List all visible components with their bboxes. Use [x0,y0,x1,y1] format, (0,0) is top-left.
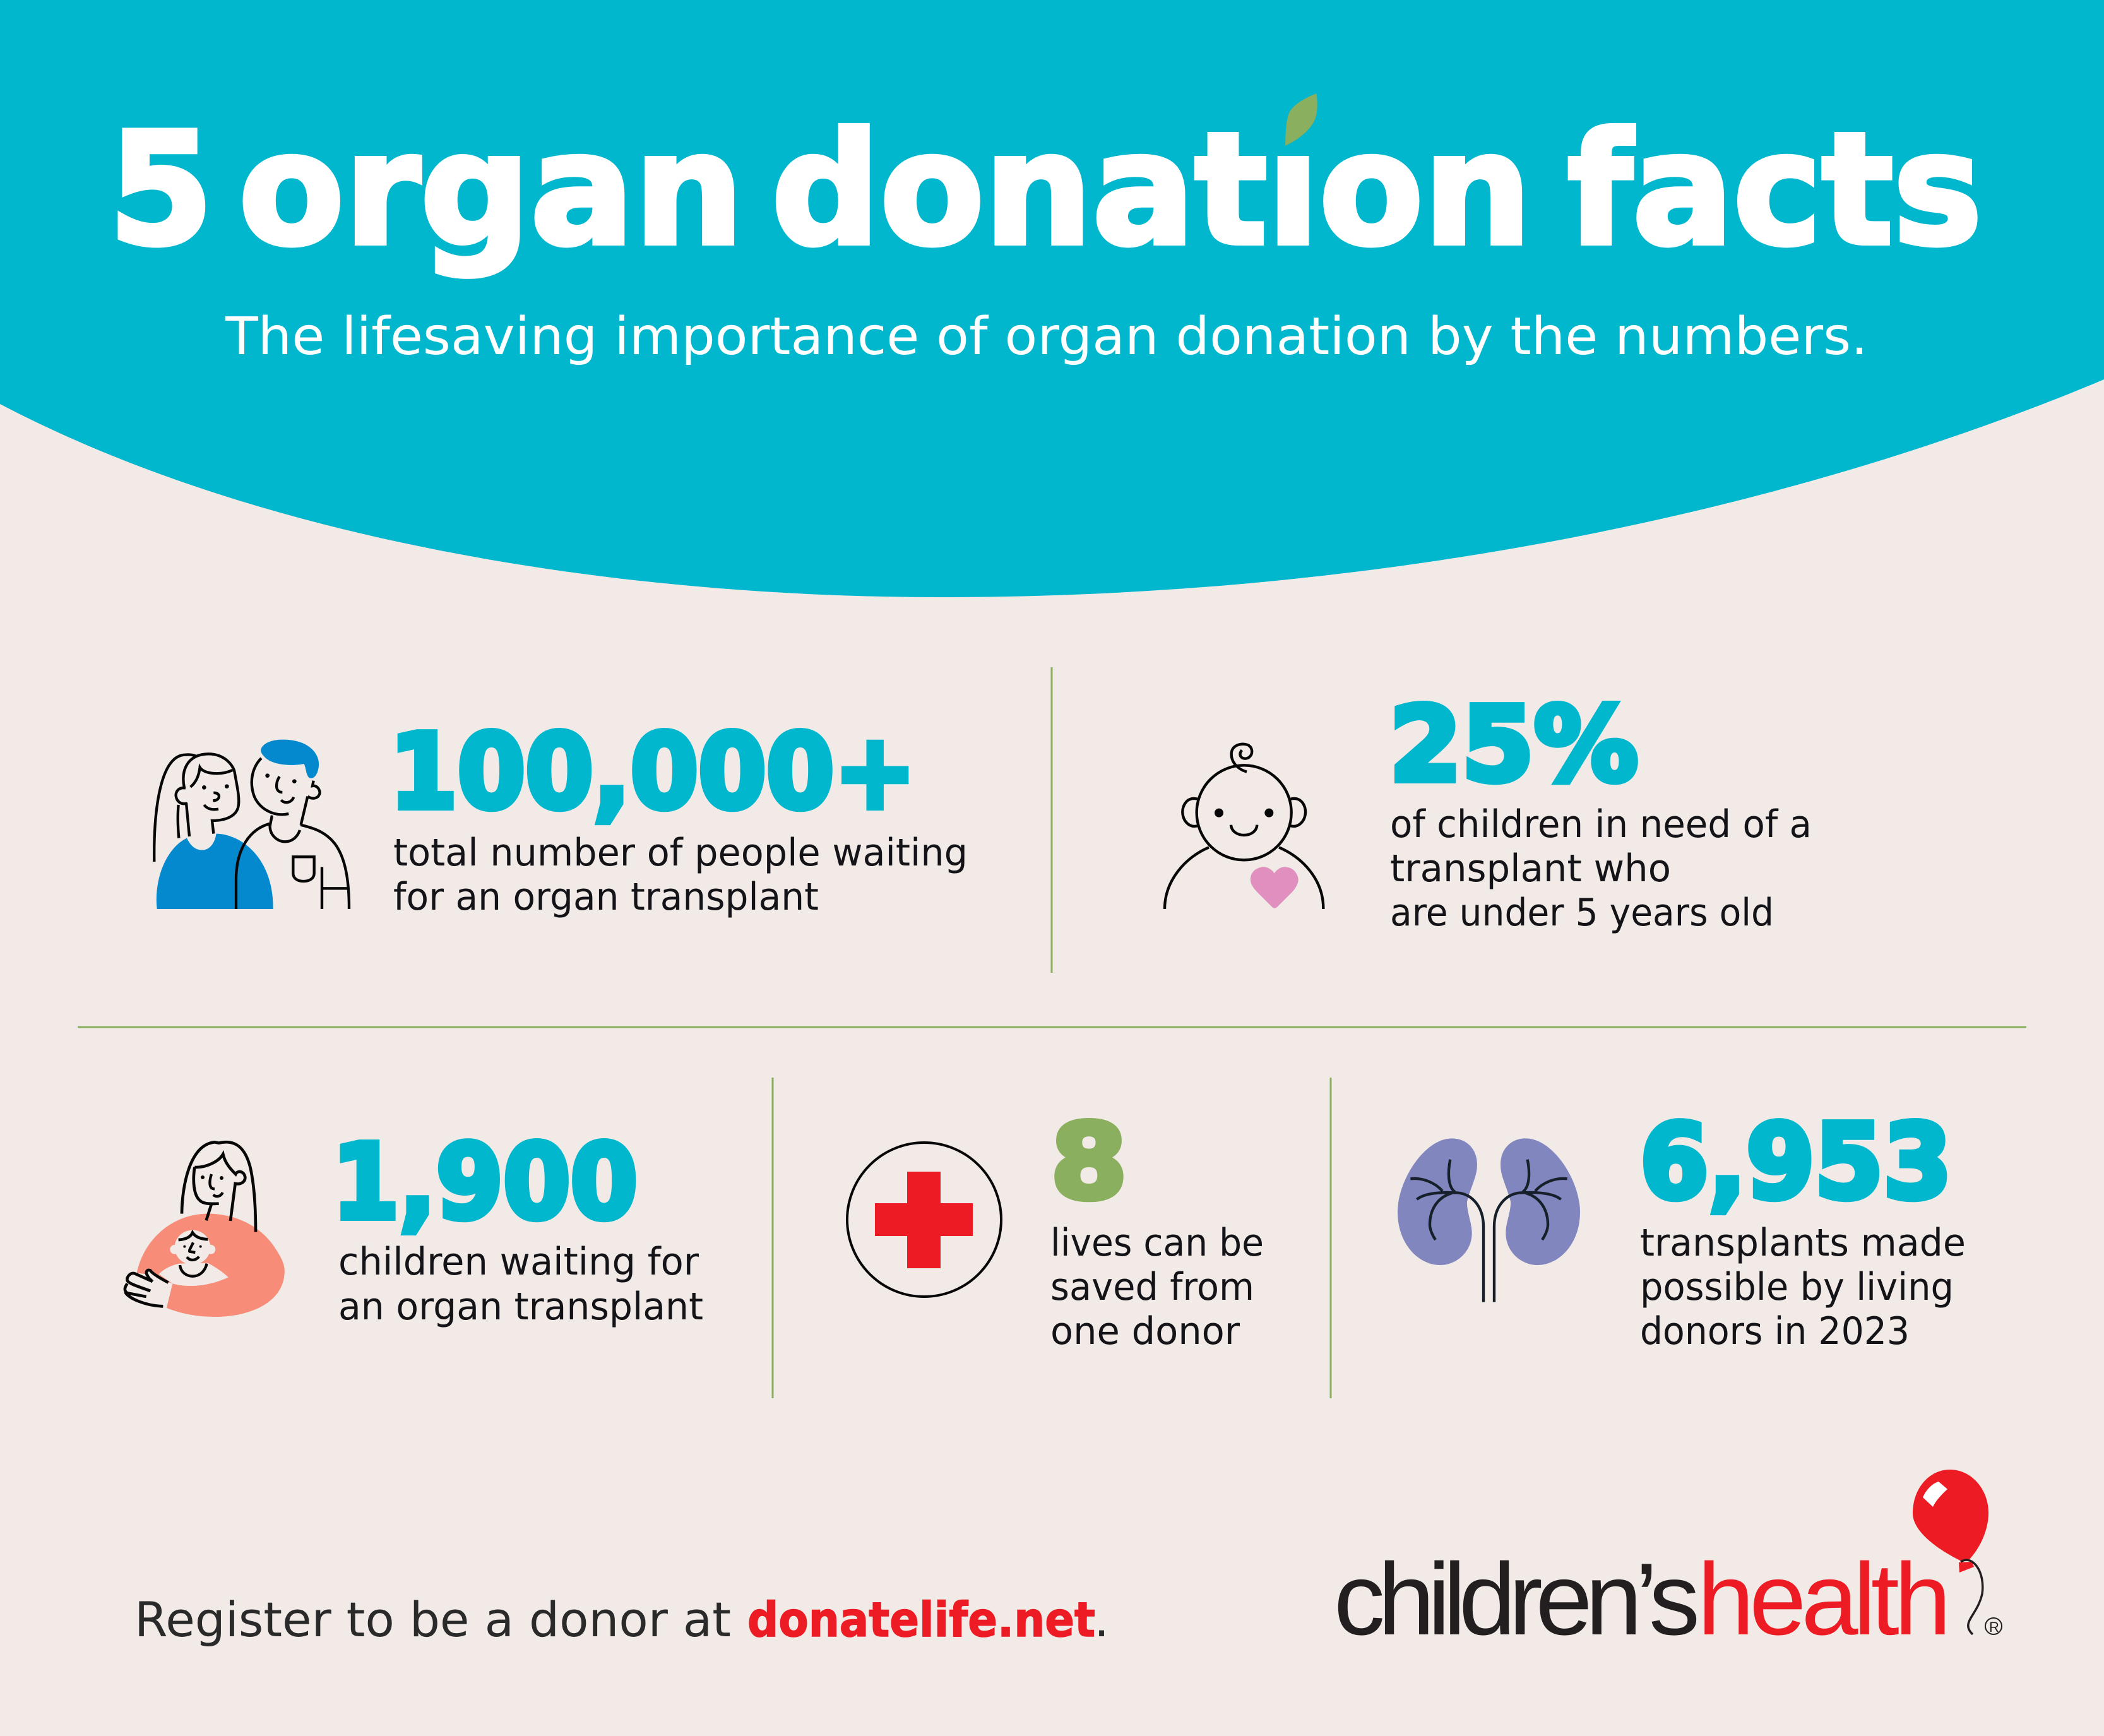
panel: 8 lives [847,1103,1264,1353]
footer call to action [134,1591,1109,1648]
text: transplants made possible: donors in 2023 [1640,1309,1910,1353]
panel: 25% of children [1165,686,1812,935]
text: total number of people waiting: total number of people waiting [393,831,968,875]
text: total number of people waiting: for an organ transplant [393,875,819,919]
icon: couple [154,740,349,909]
subtitle: The lifesaving importance of organ donation by the numbers. [225,307,1868,367]
logo: children's health [1334,1470,2002,1656]
panel: 1,900 children [124,1123,703,1329]
text: of children in need: are under 5 years old [1390,891,1774,935]
icon: red balloon: R [1989,1619,1999,1635]
number: 25%: 25% [1389,686,1638,805]
footer call to action: Register to be a donor at [134,1591,731,1648]
text: transplants made possible [1640,1221,1966,1353]
text: transplants made possible: possible by living [1640,1265,1954,1309]
panel: 100,000+ people waiting [154,713,968,919]
number: 8: 8 [1051,1103,1127,1222]
title: donation [771,100,1531,280]
number: 1,900: 1,900 [332,1123,638,1242]
text: children waiting: an organ transplant [338,1285,703,1329]
header band [0,0,2104,597]
text: total number of people waiting [393,831,968,919]
title [109,82,1982,280]
number: 6,953: 6,953 [1640,1103,1952,1222]
text: of children in need: of children in need of a [1390,802,1812,847]
title: organ [239,100,744,280]
logo: children's health: children’s [1334,1542,1700,1656]
footer call to action: . [1094,1591,1109,1648]
text: lives can be saved [1050,1221,1264,1353]
icon: red cross in circle [847,1143,1001,1297]
logo: children's health: health [1697,1542,1951,1656]
title: 5 [109,100,213,280]
icon: kidneys [1398,1138,1580,1302]
icon: leaf on the letter i [1285,93,1317,146]
text: children waiting: children waiting for [338,1240,699,1284]
title: facts [1567,100,1982,280]
footer call to action: donatelife.net [747,1591,1095,1648]
text: lives can be saved: one donor [1050,1309,1240,1353]
panel: 6,953 transplants [1398,1103,1966,1353]
text: children waiting [338,1240,703,1329]
text: of children in need [1390,802,1812,935]
icon: red balloon [1913,1470,2002,1635]
text: lives can be saved: saved from [1050,1265,1254,1309]
text: lives can be saved: lives can be [1050,1221,1264,1265]
icon: mother holding child [124,1142,285,1317]
icon: baby with heart [1165,744,1323,909]
text: of children in need: transplant who [1390,847,1671,891]
number: 100,000+: 100,000+ [389,713,916,832]
text: transplants made possible: transplants made [1640,1221,1966,1265]
